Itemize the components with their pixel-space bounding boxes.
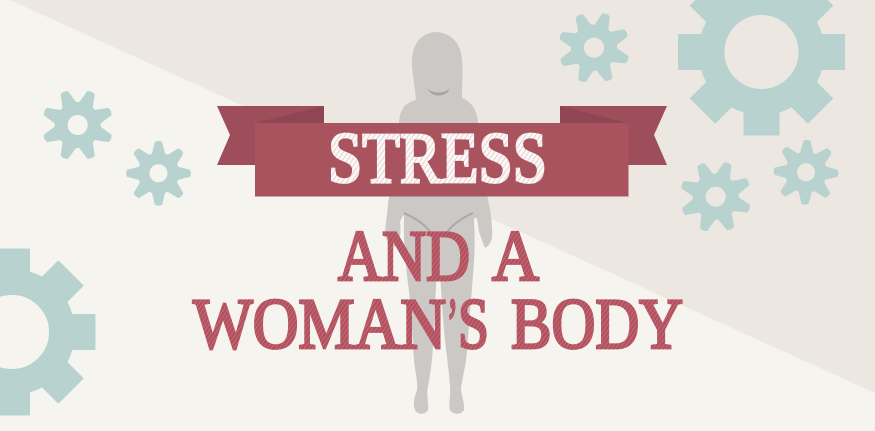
- ribbon: right tail: [560, 106, 667, 165]
- banner ribbon: [217, 106, 667, 196]
- icon: small gear top centre right: [548, 2, 640, 94]
- icon: large gear bottom left: [0, 248, 96, 416]
- icon: small gear right lower: [670, 151, 762, 243]
- ribbon: main band: [255, 123, 628, 196]
- icon: small gear left upper: [31, 78, 125, 172]
- title: STRESS: STRESS: [328, 118, 547, 198]
- icon: small gear left lower: [126, 141, 191, 206]
- subtitle: and a woman's body: A: [492, 216, 539, 296]
- icon: small gear far right: [772, 139, 840, 206]
- subtitle: and a woman's body: [193, 216, 683, 364]
- ribbon: left fold: [255, 106, 324, 123]
- subtitle: and a woman's body: AND: [338, 216, 470, 296]
- ribbon: right fold: [560, 106, 628, 123]
- icon: large gear top right: [678, 0, 845, 136]
- subtitle: and a woman's body: WOMAN: [193, 284, 446, 364]
- figure: smile: [427, 88, 450, 96]
- subtitle: and a woman's body: BODY: [511, 284, 683, 364]
- figure: woman silhouette: [385, 32, 492, 414]
- ribbon: left tail: [217, 106, 324, 165]
- subtitle: and a woman's body: S: [458, 284, 489, 364]
- figure: underwear line: [404, 213, 473, 233]
- subtitle: and a woman's body: ’: [447, 284, 458, 364]
